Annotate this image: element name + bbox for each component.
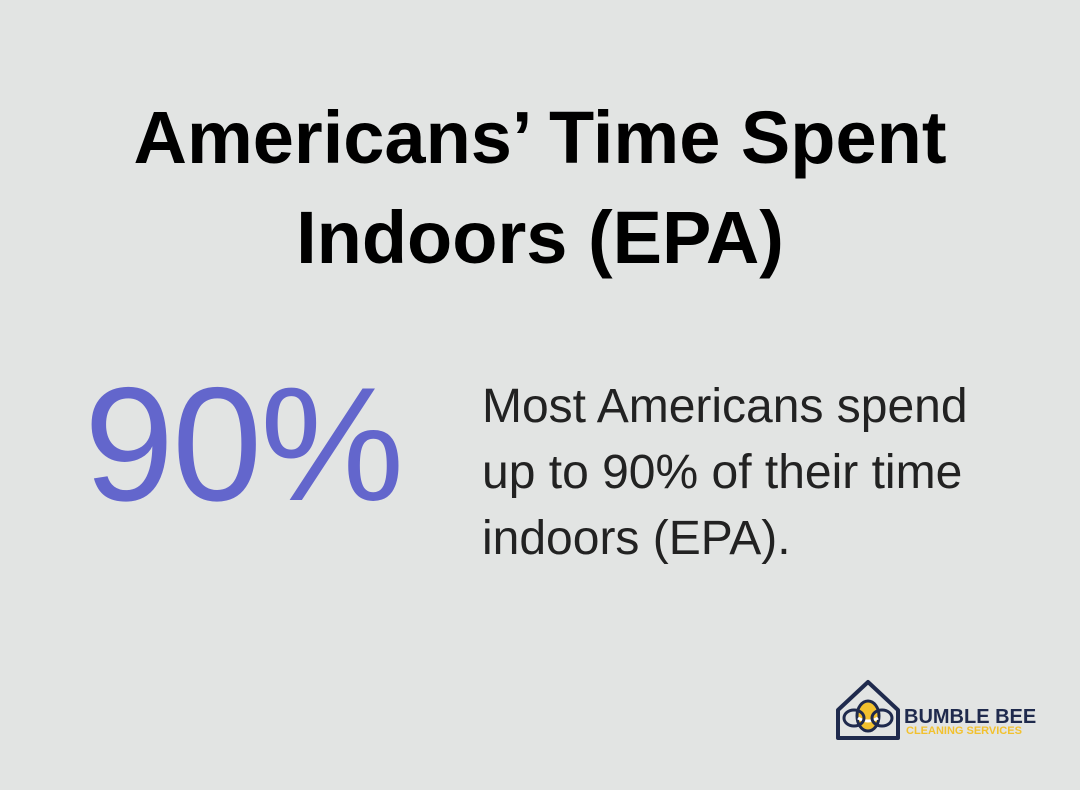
description [482,380,968,565]
logo [836,680,1036,740]
description: up to 90% of their time [482,446,962,499]
title: Americans’ Time Spent [134,96,946,179]
description: indoors (EPA). [482,512,791,565]
description: Most Americans spend [482,380,968,433]
big stat: 90% [84,354,402,535]
title [134,96,946,279]
logo text: BUMBLE BEE [904,706,1036,728]
title: Indoors (EPA) [296,196,784,279]
logo text: CLEANING SERVICES [906,725,1022,737]
icon: house bee [838,682,898,738]
